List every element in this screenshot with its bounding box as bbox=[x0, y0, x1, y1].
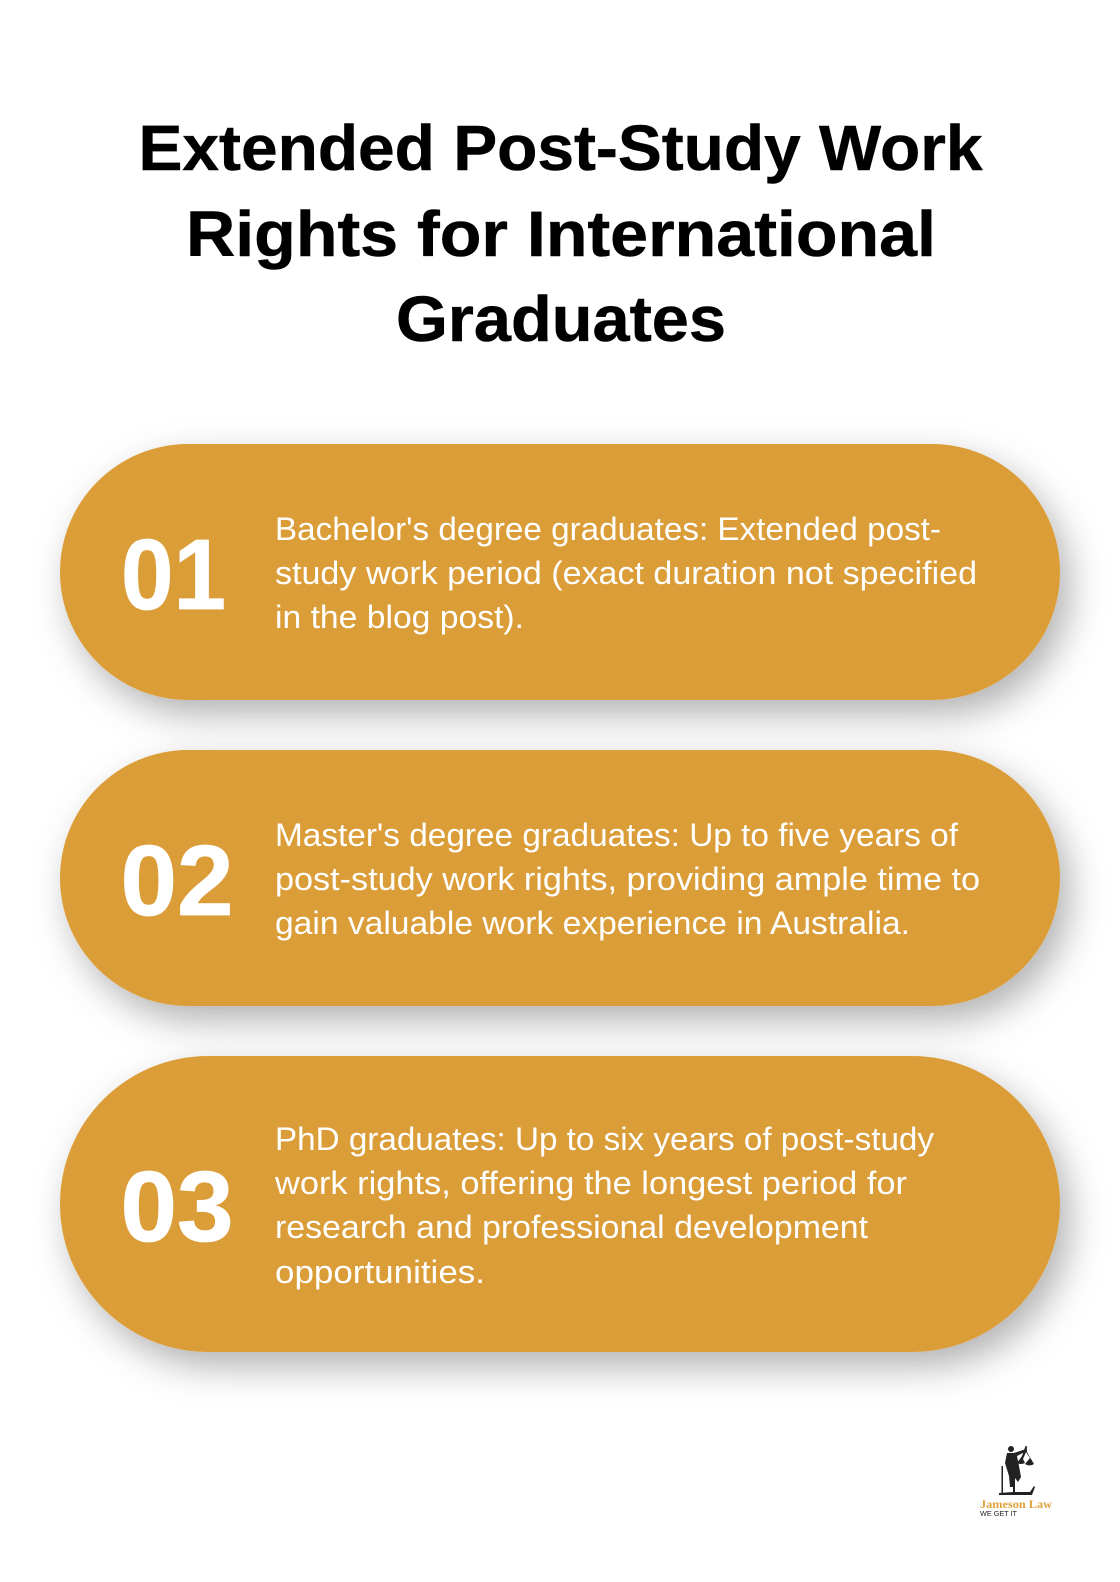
logo tagline: WE GET IT bbox=[980, 1509, 1017, 1518]
title: Rights for International bbox=[186, 198, 936, 270]
text block 1 bbox=[275, 511, 977, 635]
text block 2: Master's degree graduates: Up to five years of bbox=[275, 817, 959, 853]
text block 2: gain valuable work experience in Australia. bbox=[275, 905, 910, 941]
title: Extended Post-Study Work bbox=[138, 112, 983, 184]
number 03: 03 bbox=[120, 1151, 234, 1263]
pill background 1 bbox=[60, 444, 1060, 700]
text block 3: work rights, offering the longest period for bbox=[274, 1165, 907, 1201]
text block 1: in the blog post). bbox=[275, 599, 524, 635]
logo: Jameson Law bbox=[980, 1446, 1053, 1518]
text block 3: research and professional development bbox=[275, 1209, 868, 1245]
panel: master's degree graduates bbox=[60, 750, 1060, 1006]
text block 3: opportunities. bbox=[275, 1254, 485, 1290]
pill background 2 bbox=[60, 750, 1060, 1006]
text block 2: post-study work rights, providing ample time to bbox=[275, 861, 980, 897]
text block 3: PhD graduates: Up to six years of post-study bbox=[275, 1121, 935, 1157]
number 02: 02 bbox=[120, 825, 234, 937]
panel: bachelor's degree graduates bbox=[60, 444, 1060, 700]
logo wordmark: Jameson Law bbox=[980, 1499, 1053, 1511]
title bbox=[138, 112, 983, 355]
text block 1: study work period (exact duration not specified bbox=[275, 555, 977, 591]
title: Graduates bbox=[396, 283, 726, 355]
panel: PhD graduates bbox=[60, 1056, 1060, 1352]
icon: lady justice bbox=[999, 1446, 1035, 1495]
text block 3 bbox=[274, 1121, 935, 1290]
text block 1: Bachelor's degree graduates: Extended post- bbox=[275, 511, 941, 547]
number 01: 01 bbox=[121, 519, 226, 631]
text block 2 bbox=[275, 817, 980, 941]
pill background 3 bbox=[60, 1056, 1060, 1352]
